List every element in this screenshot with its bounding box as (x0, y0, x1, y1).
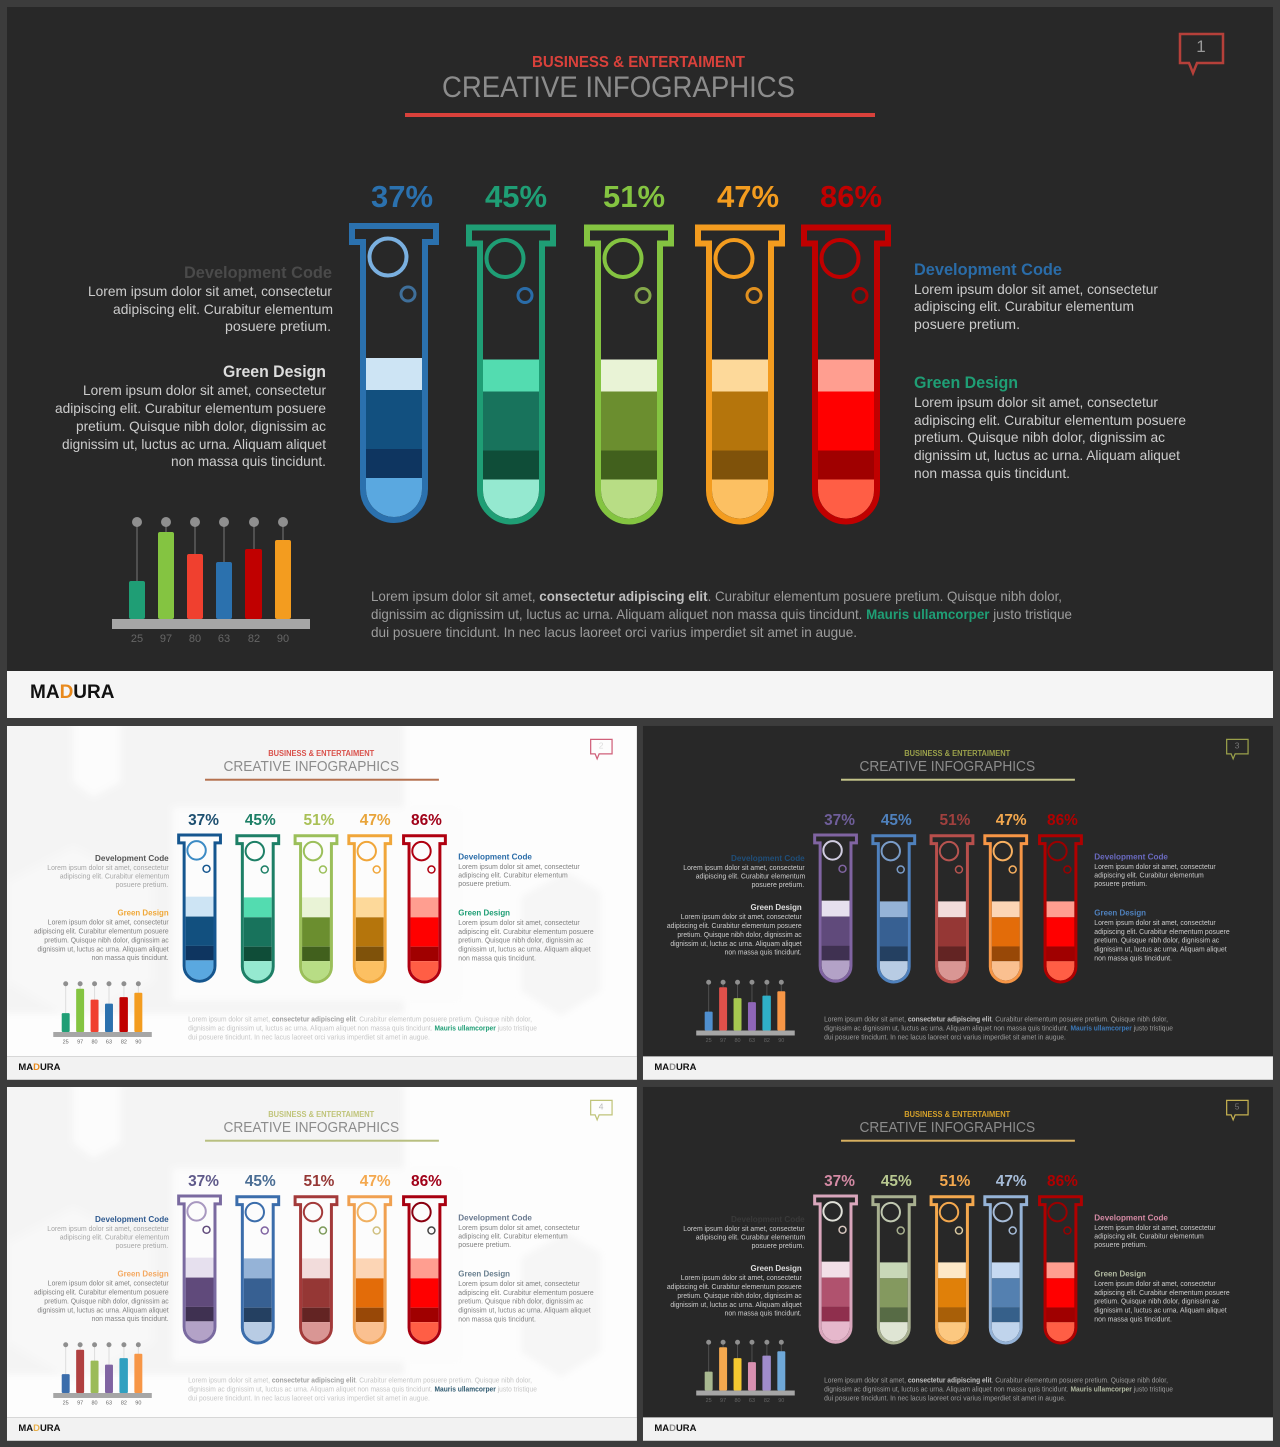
logo: MADURA (30, 682, 115, 703)
right text: Green Design: adipiscing elit. Curabitur elementum posuere (458, 929, 594, 936)
bottom paragraph (824, 1017, 1173, 1041)
right text: Green Design: Green Design (1094, 908, 1146, 918)
left text: Green Design: Lorem ipsum dolor sit amet, consectetur (48, 920, 169, 927)
icon: speech bubble with slide number: 2 (599, 740, 604, 750)
percent labels: 45% (245, 1173, 276, 1190)
right text: Green Design: Green Design (458, 908, 510, 918)
right text: Green Design: adipiscing elit. Curabitur elementum posuere (1094, 1290, 1230, 1297)
test tube 2 (873, 836, 915, 982)
left text: Development Code (683, 1214, 805, 1250)
right text: Development Code: Lorem ipsum dolor sit amet, consectetur (1094, 1225, 1216, 1232)
icon: speech bubble with slide number (591, 739, 612, 759)
left text: Green Design: Lorem ipsum dolor sit amet, consectetur (681, 1275, 802, 1282)
right text: Green Design: dignissim ut, luctus ac urna. Aliquam aliquet (1094, 1307, 1227, 1314)
right text: Green Design (458, 908, 594, 962)
test tube 2 (469, 228, 553, 522)
left text: Development Code: posuere pretium. (115, 882, 168, 889)
right text: Green Design: Lorem ipsum dolor sit amet, consectetur (1094, 1281, 1216, 1288)
slide 3: dark theme (643, 726, 1273, 1080)
percent labels: 47% (717, 179, 779, 214)
left text: Green Design: Lorem ipsum dolor sit amet, consectetur (681, 914, 802, 921)
bottom paragraph: Lorem ipsum dolor sit amet, consectetur adipiscing elit. Curabitur elementum posuere pretium. Quisque nibh dolor, (824, 1017, 1168, 1024)
title: CREATIVE INFOGRAPHICS (859, 758, 1035, 775)
test tube 5 (404, 836, 445, 982)
hexagon patterned background (4, 1079, 637, 1417)
subtitle: BUSINESS & ENTERTAIMENT (904, 1110, 1010, 1119)
bottom paragraph (824, 1378, 1173, 1402)
left text: Development Code (47, 1214, 169, 1250)
bar chart: 63 (106, 1400, 112, 1406)
bar chart: 80 (189, 633, 201, 645)
right text: Green Design: non massa quis tincidunt. (914, 465, 1070, 481)
left text: Green Design: Green Design (223, 362, 326, 381)
bar chart: 82 (248, 633, 260, 645)
slide 2: light theme (4, 718, 637, 1080)
right text: Green Design: non massa quis tincidunt. (458, 1316, 536, 1323)
left text: Development Code: Lorem ipsum dolor sit amet, consectetur (683, 865, 805, 872)
bottom paragraph: dui posuere tincidunt. In nec lacus laoreet orci varius imperdiet sit amet in augue. (371, 624, 857, 640)
left text: Green Design: dignissim ut, luctus ac urna. Aliquam aliquet (670, 941, 802, 948)
logo: MADURA (654, 1423, 697, 1434)
test tube 1 (179, 835, 220, 981)
icon: speech bubble with slide number: 5 (1235, 1101, 1240, 1111)
left text: Green Design: adipiscing elit. Curabitur elementum posuere (667, 1284, 802, 1291)
left text: Green Design: non massa quis tincidunt. (92, 955, 169, 962)
right text: Green Design: pretium. Quisque nibh dolor, dignissim ac (1094, 1298, 1220, 1305)
right text: Green Design: dignissim ut, luctus ac urna. Aliquam aliquet (458, 1307, 591, 1314)
percent labels: 37% (371, 179, 433, 214)
left text: Green Design: pretium. Quisque nibh dolor, dignissim ac (76, 418, 326, 434)
icon: speech bubble with slide number: 3 (1235, 740, 1240, 750)
bar chart: 90 (778, 1038, 784, 1044)
bar chart: 97 (160, 633, 172, 645)
right text: Green Design (1094, 1269, 1230, 1323)
test tube 5 (1040, 1197, 1081, 1343)
right text: Green Design: dignissim ut, luctus ac urna. Aliquam aliquet (458, 946, 591, 953)
percent labels: 37% (188, 1173, 219, 1190)
right text: Development Code: Lorem ipsum dolor sit amet, consectetur (1094, 864, 1216, 871)
hexagon patterned background (4, 718, 637, 1056)
left text: Development Code: Lorem ipsum dolor sit amet, consectetur (47, 865, 169, 872)
right text: Green Design (1094, 908, 1230, 962)
right text: Green Design: Lorem ipsum dolor sit amet, consectetur (1094, 920, 1216, 927)
left text: Development Code: posuere pretium. (115, 1243, 168, 1250)
percent labels (188, 1173, 442, 1190)
left text: Green Design: dignissim ut, luctus ac urna. Aliquam aliquet (62, 436, 326, 452)
bottom paragraph: dignissim ac dignissim ut, luctus ac urna. Aliquam aliquet non massa quis tincidunt. Mauris ullamcorper justo tristique (371, 606, 1072, 622)
percent labels: 47% (996, 1173, 1027, 1190)
left text: Green Design: Green Design (117, 908, 169, 918)
percent labels: 51% (603, 179, 665, 214)
bar chart: 90 (135, 1400, 141, 1406)
test tube 3 (931, 1197, 973, 1343)
footer bar (7, 1056, 637, 1080)
icon: speech bubble with slide number: 1 (1196, 37, 1206, 56)
test tube 5 (804, 228, 888, 522)
right text: Development Code: Development Code (1094, 851, 1168, 861)
percent labels: 45% (485, 179, 547, 214)
left text: Development Code: Development Code (731, 1214, 805, 1224)
bottom paragraph: Lorem ipsum dolor sit amet, consectetur adipiscing elit. Curabitur elementum posuere pretium. Quisque nibh dolor, (188, 1378, 532, 1385)
left text: Green Design (667, 1263, 802, 1317)
bar chart: 63 (106, 1039, 112, 1045)
right text: Green Design: Green Design (914, 373, 1018, 392)
percent labels: 86% (820, 179, 882, 214)
slide 5: dark theme (643, 1087, 1273, 1441)
right text: Green Design: pretium. Quisque nibh dolor, dignissim ac (458, 937, 584, 944)
right text: Development Code: Development Code (914, 260, 1062, 279)
test tube 5 (1040, 836, 1081, 982)
right text: Development Code: adipiscing elit. Curabitur elementum (458, 1233, 568, 1240)
left text: Green Design (667, 902, 802, 956)
left text: Green Design: pretium. Quisque nibh dolor, dignissim ac (44, 937, 169, 944)
left text: Green Design: non massa quis tincidunt. (725, 1310, 802, 1317)
percent labels: 86% (411, 812, 442, 829)
icon: speech bubble with slide number (1227, 1100, 1248, 1120)
right text: Development Code (1094, 1212, 1216, 1249)
right text: Development Code: Lorem ipsum dolor sit amet, consectetur (458, 864, 580, 871)
left text: Green Design: dignissim ut, luctus ac urna. Aliquam aliquet (37, 1307, 169, 1314)
left text: Development Code: Lorem ipsum dolor sit amet, consectetur (683, 1226, 805, 1233)
bar chart: 25 (63, 1039, 69, 1045)
bar chart: 90 (277, 633, 289, 645)
left text: Green Design: pretium. Quisque nibh dolor, dignissim ac (44, 1298, 169, 1305)
bottom paragraph: dignissim ac dignissim ut, luctus ac urna. Aliquam aliquet non massa quis tincidunt. Mauris ullamcorper justo tristique (188, 1026, 537, 1033)
right text: Development Code (458, 1212, 580, 1249)
icon: speech bubble with slide number (1180, 34, 1223, 73)
left text: Green Design: Lorem ipsum dolor sit amet, consectetur (83, 382, 326, 398)
test tube 1 (815, 835, 856, 981)
right text: Green Design: adipiscing elit. Curabitur elementum posuere (1094, 929, 1230, 936)
bar chart: 82 (764, 1398, 770, 1404)
left text: Development Code: posuere pretium. (225, 318, 331, 334)
test tube 3 (931, 836, 973, 982)
test tube 3 (295, 836, 337, 982)
left text: Green Design (55, 362, 326, 469)
test tube 3 (587, 228, 671, 522)
percent labels: 86% (1047, 1173, 1078, 1190)
left text: Green Design: Green Design (117, 1269, 169, 1279)
bar chart: 63 (749, 1398, 755, 1404)
subtitle: BUSINESS & ENTERTAIMENT (268, 1110, 374, 1119)
left text: Development Code (47, 853, 169, 889)
icon: speech bubble with slide number (1227, 739, 1248, 759)
test tube 1 (179, 1196, 220, 1342)
left text: Development Code: posuere pretium. (751, 1243, 804, 1250)
right text: Green Design: Lorem ipsum dolor sit amet, consectetur (458, 1281, 580, 1288)
bottom paragraph: dignissim ac dignissim ut, luctus ac urna. Aliquam aliquet non massa quis tincidunt. Mauris ullamcorper justo tristique (824, 1387, 1173, 1394)
bar chart: 97 (720, 1038, 726, 1044)
left text: Green Design: Lorem ipsum dolor sit amet, consectetur (48, 1281, 169, 1288)
subtitle: BUSINESS & ENTERTAIMENT (904, 749, 1010, 758)
bottom paragraph (188, 1378, 537, 1402)
percent labels: 45% (245, 812, 276, 829)
bar chart (53, 981, 152, 1045)
right text: Green Design: Lorem ipsum dolor sit amet, consectetur (914, 394, 1158, 410)
test tube 1 (352, 226, 436, 520)
left text: Green Design: Green Design (750, 902, 802, 912)
left text: Green Design: dignissim ut, luctus ac urna. Aliquam aliquet (670, 1302, 802, 1309)
bottom paragraph: dignissim ac dignissim ut, luctus ac urna. Aliquam aliquet non massa quis tincidunt. Mauris ullamcorper justo tristique (824, 1026, 1173, 1033)
main slide: dark theme (7, 7, 1273, 718)
title: CREATIVE INFOGRAPHICS (859, 1119, 1035, 1136)
left text: Development Code: Development Code (95, 853, 169, 863)
right text: Development Code: posuere pretium. (1094, 881, 1147, 888)
title underline (205, 1140, 439, 1142)
percent labels: 51% (304, 1173, 335, 1190)
icon: speech bubble with slide number (591, 1100, 612, 1120)
bar chart: 80 (92, 1039, 98, 1045)
percent labels: 47% (360, 812, 391, 829)
test tube 1 (815, 1196, 856, 1342)
title: CREATIVE INFOGRAPHICS (442, 71, 795, 104)
percent labels (371, 179, 882, 214)
bottom paragraph (188, 1017, 537, 1041)
bar chart (696, 1340, 795, 1404)
percent labels (824, 812, 1078, 829)
right text: Development Code: Development Code (458, 1212, 532, 1222)
right text: Development Code: posuere pretium. (914, 316, 1020, 332)
right text: Development Code (914, 260, 1158, 332)
title: CREATIVE INFOGRAPHICS (223, 758, 399, 775)
left text: Green Design: non massa quis tincidunt. (171, 453, 326, 469)
left text: Green Design: non massa quis tincidunt. (725, 949, 802, 956)
bottom paragraph: dui posuere tincidunt. In nec lacus laoreet orci varius imperdiet sit amet in augue. (188, 1034, 430, 1041)
right text: Development Code: adipiscing elit. Curabitur elementum (1094, 1233, 1204, 1240)
left text: Green Design: adipiscing elit. Curabitur elementum posuere (667, 923, 802, 930)
percent labels: 47% (360, 1173, 391, 1190)
right text: Green Design: pretium. Quisque nibh dolor, dignissim ac (458, 1298, 584, 1305)
bar chart: 25 (63, 1400, 69, 1406)
left text: Development Code: adipiscing elit. Curabitur elementum (696, 874, 805, 881)
left text: Green Design (34, 1269, 169, 1323)
subtitle: BUSINESS & ENTERTAIMENT (532, 54, 745, 71)
percent labels: 86% (411, 1173, 442, 1190)
logo: MADURA (18, 1062, 61, 1073)
bar chart: 63 (218, 633, 230, 645)
right text: Green Design: adipiscing elit. Curabitur elementum posuere (458, 1290, 594, 1297)
bottom paragraph: dui posuere tincidunt. In nec lacus laoreet orci varius imperdiet sit amet in augue. (188, 1395, 430, 1402)
bar chart (53, 1342, 152, 1406)
right text: Green Design: dignissim ut, luctus ac urna. Aliquam aliquet (914, 447, 1180, 463)
left text: Development Code: Development Code (95, 1214, 169, 1224)
test tube 2 (237, 1197, 279, 1343)
percent labels: 51% (940, 1173, 971, 1190)
right text: Green Design: adipiscing elit. Curabitur elementum posuere (914, 412, 1186, 428)
right text: Green Design: dignissim ut, luctus ac urna. Aliquam aliquet (1094, 946, 1227, 953)
bar chart: 90 (135, 1039, 141, 1045)
test tube 3 (295, 1197, 337, 1343)
slide 4: light theme (4, 1079, 637, 1441)
left text: Green Design: dignissim ut, luctus ac urna. Aliquam aliquet (37, 946, 169, 953)
left text: Green Design: Green Design (750, 1263, 802, 1273)
left text: Development Code (88, 263, 333, 334)
right text: Development Code: Lorem ipsum dolor sit amet, consectetur (914, 281, 1158, 297)
bottom paragraph: Lorem ipsum dolor sit amet, consectetur adipiscing elit. Curabitur elementum posuere pretium. Quisque nibh dolor, (824, 1378, 1168, 1385)
bottom paragraph: dui posuere tincidunt. In nec lacus laoreet orci varius imperdiet sit amet in augue. (824, 1395, 1066, 1402)
left text: Development Code: adipiscing elit. Curabitur elementum (60, 874, 169, 881)
right text: Development Code: Development Code (458, 851, 532, 861)
bar chart: 90 (778, 1398, 784, 1404)
title underline (841, 779, 1075, 781)
bar chart: 82 (764, 1038, 770, 1044)
bottom paragraph: Lorem ipsum dolor sit amet, consectetur adipiscing elit. Curabitur elementum posuere pretium. Quisque nibh dolor, (188, 1017, 532, 1024)
percent labels: 51% (940, 812, 971, 829)
right text: Development Code: posuere pretium. (458, 881, 511, 888)
percent labels: 86% (1047, 812, 1078, 829)
footer bar (7, 671, 1273, 718)
bar chart: 97 (77, 1039, 83, 1045)
footer bar (643, 1056, 1273, 1080)
right text: Green Design (458, 1269, 594, 1323)
right text: Development Code (1094, 851, 1216, 888)
left text: Green Design (34, 908, 169, 962)
test tube 2 (873, 1197, 915, 1343)
footer bar (643, 1417, 1273, 1441)
right text: Green Design: pretium. Quisque nibh dolor, dignissim ac (914, 429, 1165, 445)
left text: Green Design: adipiscing elit. Curabitur elementum posuere (34, 1289, 169, 1296)
bar chart: 63 (749, 1038, 755, 1044)
right text: Green Design: Green Design (1094, 1269, 1146, 1279)
bottom paragraph: Lorem ipsum dolor sit amet, consectetur adipiscing elit. Curabitur elementum posuere pretium. Quisque nibh dolor, (371, 588, 1062, 604)
test tube 4 (349, 1197, 391, 1343)
left text: Development Code: adipiscing elit. Curabitur elementum (60, 1235, 169, 1242)
left text: Development Code: adipiscing elit. Curabitur elementum (113, 301, 333, 317)
left text: Development Code: Lorem ipsum dolor sit amet, consectetur (88, 283, 332, 299)
left text: Development Code: adipiscing elit. Curabitur elementum (696, 1235, 805, 1242)
right text: Development Code: adipiscing elit. Curabitur elementum (914, 298, 1134, 314)
right text: Green Design: non massa quis tincidunt. (1094, 1316, 1172, 1323)
right text: Green Design: non massa quis tincidunt. (1094, 955, 1172, 962)
bar chart: 80 (734, 1038, 741, 1044)
bar chart (696, 980, 795, 1044)
test tube 4 (698, 228, 782, 522)
percent labels: 37% (824, 812, 855, 829)
right text: Green Design: non massa quis tincidunt. (458, 955, 536, 962)
right text: Development Code (458, 851, 580, 888)
left text: Development Code (683, 853, 805, 889)
right text: Development Code: adipiscing elit. Curabitur elementum (1094, 872, 1204, 879)
percent labels: 37% (188, 812, 219, 829)
left text: Green Design: pretium. Quisque nibh dolor, dignissim ac (677, 932, 802, 939)
percent labels: 47% (996, 812, 1027, 829)
right text: Development Code: Lorem ipsum dolor sit amet, consectetur (458, 1225, 580, 1232)
left text: Development Code: Development Code (184, 263, 332, 282)
bar chart: 97 (720, 1398, 726, 1404)
title: CREATIVE INFOGRAPHICS (223, 1119, 399, 1136)
bottom paragraph: dignissim ac dignissim ut, luctus ac urna. Aliquam aliquet non massa quis tincidunt. Mauris ullamcorper justo tristique (188, 1387, 537, 1394)
bottom paragraph (371, 588, 1072, 640)
left text: Green Design: pretium. Quisque nibh dolor, dignissim ac (677, 1293, 802, 1300)
right text: Green Design: pretium. Quisque nibh dolor, dignissim ac (1094, 937, 1220, 944)
bar chart: 80 (92, 1400, 98, 1406)
bar chart: 82 (121, 1039, 127, 1045)
right text: Green Design (914, 373, 1186, 481)
slide background (7, 7, 1273, 671)
title underline (405, 113, 875, 117)
title underline (841, 1140, 1075, 1142)
bar chart: 25 (131, 633, 143, 645)
icon: speech bubble with slide number: 4 (599, 1101, 604, 1111)
bar chart: 82 (121, 1400, 127, 1406)
logo: MADURA (18, 1423, 61, 1434)
percent labels: 45% (881, 1173, 912, 1190)
left text: Green Design: adipiscing elit. Curabitur elementum posuere (34, 928, 169, 935)
footer bar (7, 1417, 637, 1441)
right text: Green Design: Lorem ipsum dolor sit amet, consectetur (458, 920, 580, 927)
left text: Development Code: Development Code (731, 853, 805, 863)
left text: Green Design: non massa quis tincidunt. (92, 1316, 169, 1323)
slide background (643, 1087, 1273, 1417)
left text: Development Code: Lorem ipsum dolor sit amet, consectetur (47, 1226, 169, 1233)
bar chart: 25 (706, 1038, 712, 1044)
percent labels (188, 812, 442, 829)
subtitle: BUSINESS & ENTERTAIMENT (268, 749, 374, 758)
title underline (205, 779, 439, 781)
logo: MADURA (654, 1062, 697, 1073)
right text: Green Design: Green Design (458, 1269, 510, 1279)
percent labels (824, 1173, 1078, 1190)
percent labels: 37% (824, 1173, 855, 1190)
bar chart: 80 (734, 1398, 741, 1404)
right text: Development Code: posuere pretium. (458, 1242, 511, 1249)
bar chart: 25 (706, 1398, 712, 1404)
percent labels: 51% (304, 812, 335, 829)
test tube 4 (349, 836, 391, 982)
left text: Development Code: posuere pretium. (751, 882, 804, 889)
right text: Development Code: posuere pretium. (1094, 1242, 1147, 1249)
test tube 4 (985, 836, 1027, 982)
bar chart: 97 (77, 1400, 83, 1406)
right text: Development Code: adipiscing elit. Curabitur elementum (458, 872, 568, 879)
test tube 2 (237, 836, 279, 982)
bottom paragraph: dui posuere tincidunt. In nec lacus laoreet orci varius imperdiet sit amet in augue. (824, 1034, 1066, 1041)
left text: Green Design: adipiscing elit. Curabitur elementum posuere (55, 400, 326, 416)
bar chart (112, 517, 310, 645)
slide background (643, 726, 1273, 1056)
right text: Development Code: Development Code (1094, 1212, 1168, 1222)
percent labels: 45% (881, 812, 912, 829)
test tube 4 (985, 1197, 1027, 1343)
test tube 5 (404, 1197, 445, 1343)
